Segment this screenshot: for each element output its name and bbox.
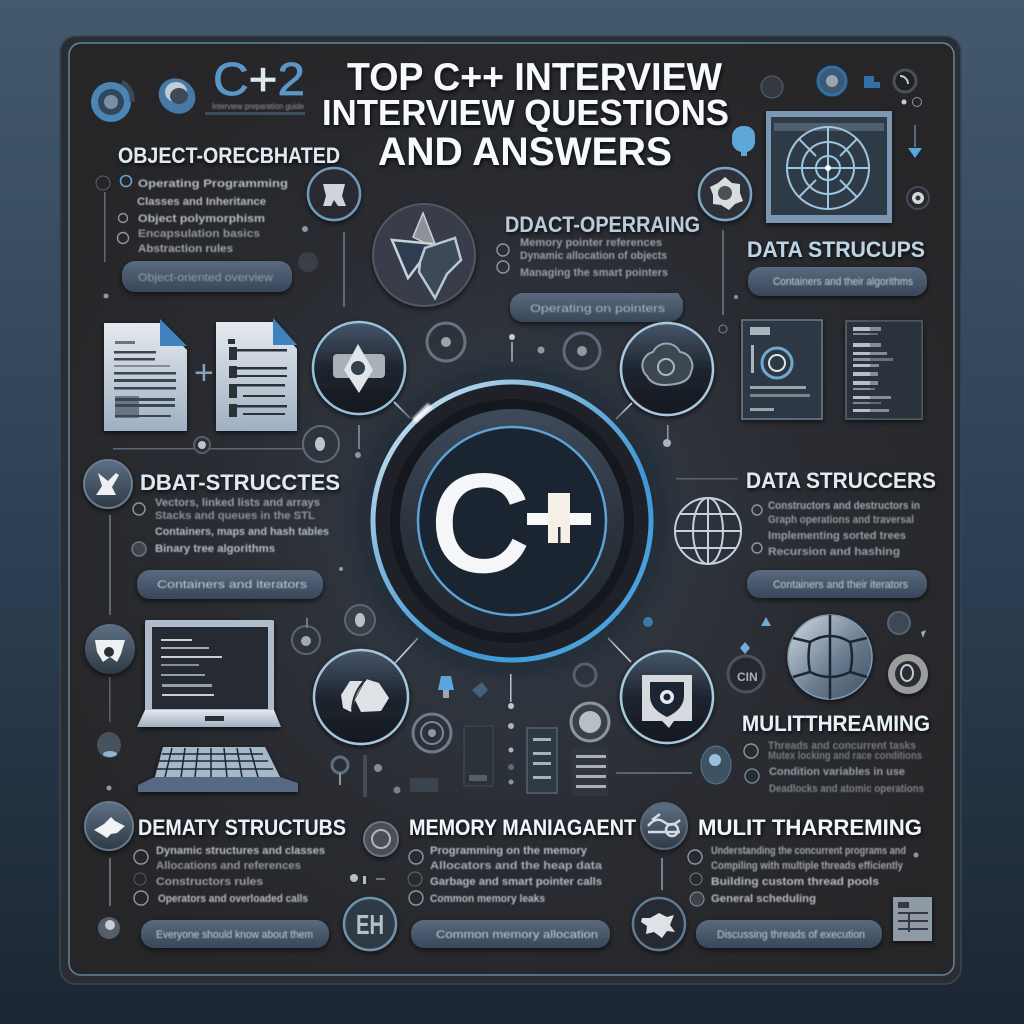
list: multithreading bottom: Compiling with multiple threads efficiently xyxy=(711,860,904,872)
list: object-oriented: Abstraction rules xyxy=(138,243,233,255)
pill: data structures right xyxy=(747,570,927,598)
list: data structures left: Vectors, linked lists and arrays xyxy=(155,497,320,509)
pill: data structures: Containers and their algorithms xyxy=(773,276,913,288)
central logo: C++ badge: + xyxy=(536,474,583,563)
list: object-oriented xyxy=(118,176,288,255)
rule to heading xyxy=(676,478,738,480)
list: multithreading bottom: Building custom thread pools xyxy=(711,876,879,888)
pill: data structures left xyxy=(137,570,323,599)
list: primary structures: Constructors rules xyxy=(156,876,263,888)
list: memory management xyxy=(408,845,603,905)
badge: left mid xyxy=(85,624,135,674)
pill: object-operating: Operating on pointers xyxy=(530,303,666,315)
list: multithreading bottom: General scheduling xyxy=(711,893,816,905)
list: primary structures xyxy=(134,845,325,905)
divider connector xyxy=(719,230,738,333)
list: data structures left: Containers, maps and hash tables xyxy=(155,526,329,538)
icon: segmented ball xyxy=(788,615,872,699)
list: primary structures: Allocations and references xyxy=(156,860,301,872)
list: memory management: Common memory leaks xyxy=(430,893,545,905)
document icon right xyxy=(216,318,297,431)
list: multithreading right: Condition variables in use xyxy=(769,766,905,778)
badge: splat xyxy=(633,898,685,950)
list: multithreading right: Deadlocks and atomic operations xyxy=(769,783,924,795)
small icons between nodes: CIN xyxy=(737,670,758,684)
list: multithreading right: Mutex locking and race conditions xyxy=(768,750,922,762)
divider with mini icons xyxy=(113,426,339,462)
heading: multithreading right: MULITTHREAMING xyxy=(742,711,930,736)
pill: multithreading bottom: Discussing threads of execution xyxy=(717,929,865,941)
connector multithreading xyxy=(661,858,663,890)
pill: object-oriented: Object-oriented overview xyxy=(138,272,273,284)
list: data structures right: Graph operations and traversal xyxy=(768,514,914,526)
list: multithreading right: Threads and concurrent tasks xyxy=(768,740,916,752)
heading: multithreading bottom: MULIT THARREMING xyxy=(698,815,922,840)
heading: primary structures: DEMATY STRUCTUBS xyxy=(138,815,346,840)
node: triangles xyxy=(373,204,475,306)
central logo: C++ badge: C xyxy=(431,447,529,599)
timeline bottom left xyxy=(98,858,120,939)
pill: memory management: Common memory allocation xyxy=(436,929,598,941)
heading: data structures: DATA STRUCUPS xyxy=(747,237,925,262)
list: data structures right: Recursion and hashing xyxy=(768,546,900,558)
pill: primary structures xyxy=(141,920,329,948)
pill: primary structures: Everyone should know about them xyxy=(156,929,313,941)
heading: object-operating: DDACT-OPERRAING xyxy=(505,212,700,237)
icon: laptop xyxy=(137,620,281,727)
list: object-oriented: Operating Programming xyxy=(138,178,288,190)
icon: keyboard xyxy=(138,747,298,792)
node: bottom left xyxy=(314,650,408,744)
pill: data structures right: Containers and their iterators xyxy=(773,579,908,591)
icon: globe xyxy=(675,498,741,564)
small icons around top nodes xyxy=(355,323,671,458)
list: multithreading right xyxy=(744,740,924,795)
icon: form card xyxy=(893,897,932,941)
heading: object-oriented: OBJECT-ORECBHATED xyxy=(118,143,340,168)
badge: bottom left xyxy=(85,802,133,850)
radar monitor xyxy=(766,111,892,223)
logo: C+2: C+2 xyxy=(213,53,305,105)
icon: blue spiral xyxy=(91,82,132,122)
list: memory management: Programming on the memory xyxy=(430,845,588,857)
title xyxy=(322,56,729,174)
badge: code brackets: EH xyxy=(356,909,384,940)
connector lines xyxy=(394,402,632,663)
badge: code glyph xyxy=(308,168,360,220)
list: primary structures: Dynamic structures and classes xyxy=(156,845,325,857)
central logo: C++ badge xyxy=(356,365,668,677)
pill: object-operating xyxy=(510,293,683,322)
list: primary structures: Operators and overloaded calls xyxy=(158,893,308,905)
title: AND ANSWERS xyxy=(378,130,672,174)
circular icon: right small xyxy=(888,654,928,694)
node: bottom right xyxy=(621,651,713,743)
list: data structures right: Constructors and destructors in xyxy=(768,500,920,512)
list: data structures left: Stacks and queues in the STL xyxy=(155,510,315,522)
timeline left top xyxy=(96,176,345,307)
document cards right xyxy=(742,320,922,419)
list: object-operating xyxy=(497,237,668,279)
pill: data structures xyxy=(748,267,927,296)
title: INTERVIEW QUESTIONS xyxy=(322,92,729,133)
pill: object-oriented xyxy=(122,261,292,292)
list: object-oriented: Object polymorphism xyxy=(138,213,265,225)
title: TOP C++ INTERVIEW xyxy=(347,56,722,99)
pill: multithreading bottom xyxy=(696,920,882,948)
list: data structures left xyxy=(132,497,329,556)
badge: memory left xyxy=(364,822,398,856)
icon: blue ring shield xyxy=(152,71,202,121)
plus between documents: + xyxy=(194,354,214,392)
list: data structures right: Implementing sorted trees xyxy=(768,530,906,542)
document icon left xyxy=(104,319,187,431)
heading: data structures left: DBAT-STRUCCTES xyxy=(140,470,340,495)
badge: multithreading link xyxy=(641,803,687,849)
pill: memory management xyxy=(411,920,610,948)
badge: left data structures xyxy=(84,460,132,508)
badge: star gear right xyxy=(699,168,751,220)
list: multithreading bottom: Understanding the concurrent programs and xyxy=(711,845,906,857)
top right mini icons xyxy=(732,67,929,209)
list: data structures left: Binary tree algorithms xyxy=(155,543,275,555)
list: data structures right xyxy=(752,500,920,558)
list: memory management: Garbage and smart pointer calls xyxy=(430,876,602,888)
list: object-operating: Managing the smart pointers xyxy=(520,267,668,279)
list: object-oriented: Classes and Inheritance xyxy=(137,196,266,208)
list: multithreading bottom xyxy=(688,845,918,906)
heading: memory management: MEMORY MANIAGAENT xyxy=(409,815,637,840)
node: top right xyxy=(621,323,713,415)
small dots xyxy=(350,874,385,884)
list: object-operating: Memory pointer references xyxy=(520,237,662,249)
node: top left xyxy=(313,322,405,414)
logo: C+2: Interview preparation guide xyxy=(212,102,305,111)
list: memory management: Allocators and the heap data xyxy=(430,860,603,872)
badge: code brackets xyxy=(344,898,396,950)
list: object-oriented: Encapsulation basics xyxy=(138,228,260,240)
small icons between nodes xyxy=(292,605,926,797)
dotted timeline left xyxy=(97,515,343,790)
heading: data structures right: DATA STRUCCERS xyxy=(746,468,936,493)
list: object-operating: Dynamic allocation of objects xyxy=(520,250,667,262)
pill: data structures left: Containers and iterators xyxy=(157,579,308,591)
